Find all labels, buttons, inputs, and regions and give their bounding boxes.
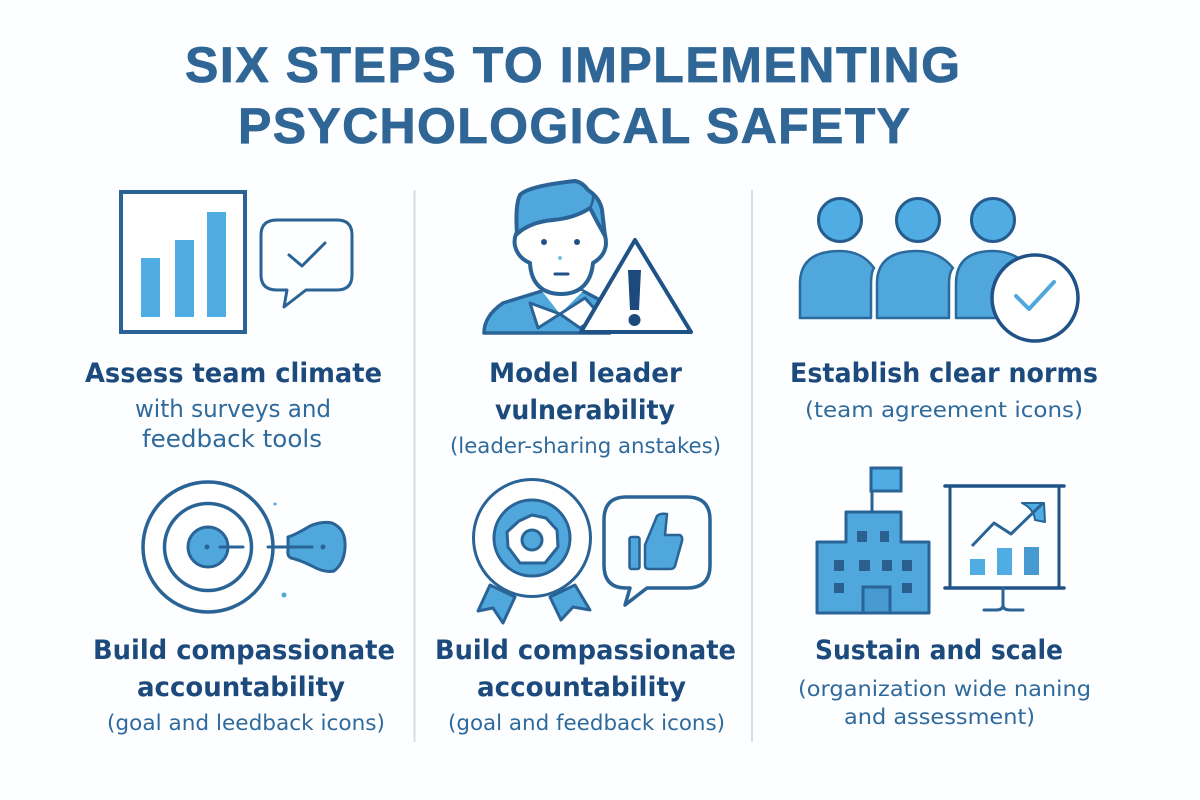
icon: building and presentation chart bbox=[817, 468, 1064, 613]
heading: Model leader bbox=[489, 358, 683, 389]
description bbox=[135, 395, 331, 453]
heading: Sustain and scale bbox=[815, 635, 1063, 666]
panel: establish clear norms bbox=[790, 198, 1098, 422]
heading bbox=[93, 635, 395, 703]
title: PSYCHOLOGICAL SAFETY bbox=[238, 98, 910, 154]
heading bbox=[489, 358, 683, 426]
heading bbox=[435, 635, 736, 703]
title: SIX STEPS TO IMPLEMENTING bbox=[185, 37, 960, 93]
icon: award and thumbs up bbox=[474, 480, 710, 623]
heading: Assess team climate bbox=[85, 358, 382, 389]
icon: target and arrow bbox=[143, 482, 345, 612]
heading: vulnerability bbox=[495, 395, 675, 426]
icon: team with check badge bbox=[800, 198, 1078, 341]
heading: Build compassionate bbox=[435, 635, 736, 666]
description: and assessment) bbox=[844, 705, 1035, 729]
heading: Establish clear norms bbox=[790, 358, 1098, 389]
icon: leader with warning triangle bbox=[484, 181, 691, 333]
panel: build compassionate accountability, left bbox=[93, 482, 395, 735]
description: (goal and feedback icons) bbox=[448, 711, 725, 735]
panel: assess team climate bbox=[85, 192, 382, 453]
description: (team agreement icons) bbox=[805, 398, 1083, 422]
icon: bar chart with speech bubble bbox=[121, 192, 352, 332]
description: with surveys and bbox=[135, 395, 331, 423]
description: feedback tools bbox=[142, 425, 322, 453]
heading: Build compassionate bbox=[93, 635, 395, 666]
description: (leader-sharing anstakes) bbox=[450, 434, 721, 458]
panel: sustain and scale bbox=[798, 468, 1091, 729]
description bbox=[798, 677, 1091, 729]
panel: build compassionate accountability, center bbox=[435, 480, 736, 735]
description: (organization wide naning bbox=[798, 677, 1091, 701]
heading: accountability bbox=[137, 672, 345, 703]
heading: accountability bbox=[477, 672, 686, 703]
description: (goal and leedback icons) bbox=[107, 711, 385, 735]
panel: model leader vulnerability bbox=[450, 181, 721, 458]
title bbox=[185, 37, 960, 154]
